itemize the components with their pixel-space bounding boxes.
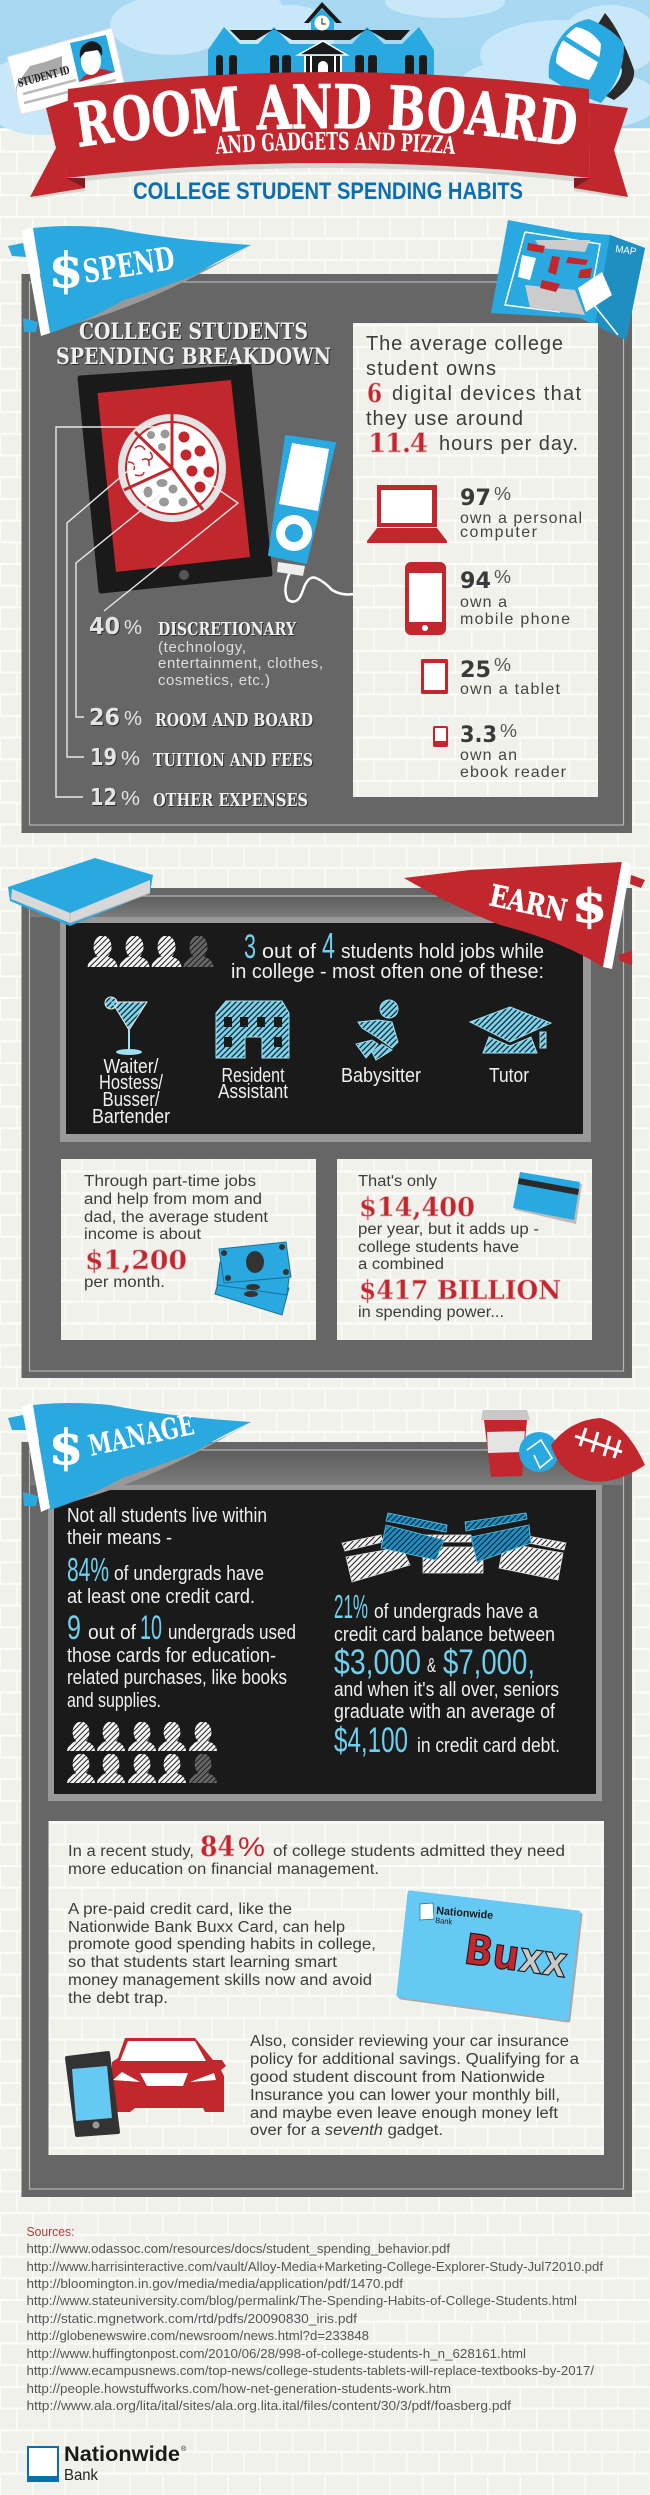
job label: waiter [92,1056,170,1128]
spending power text: $417 BILLION [359,1276,561,1306]
job label: waiter: Hostess/ [99,1072,163,1094]
icon: tablet [421,659,448,694]
school building [208,2,434,78]
stat: tablet: 25 [460,658,491,683]
campus map icon [491,220,645,340]
credit card debt text: graduate with an average of [334,1701,555,1723]
credit card text: those cards for education- [67,1645,276,1667]
tablet with pizza chart [80,367,270,591]
study text: more education on financial management. [68,1861,379,1878]
spending power text: That's only [358,1173,437,1190]
breakdown: other: 12 [90,785,117,811]
panel: spend [22,274,632,833]
dollar icon: $ [49,1420,83,1476]
credit card text [67,1505,296,1712]
icon: football [519,1418,645,1482]
breakdown: tuition: 19 [90,745,117,771]
jobs headline [231,925,544,983]
sources: http://www.ecampusnews.com/top-news/college-students-tablets-will-replace-textbooks-by-2017/ [26,2363,594,2378]
icon: coffee cup [481,1410,530,1477]
credit card text: 9 [67,1609,81,1647]
car insurance text: Insurance you can lower your monthly bill, [250,2087,560,2104]
income text: and help from mom and [84,1191,262,1208]
sources: http://bloomington.in.gov/media/media/application/pdf/1470.pdf [26,2276,403,2291]
credit card debt text: credit card balance between [334,1624,555,1646]
sources: http://people.howstuffworks.com/how-net-generation-students-work.htm [26,2381,451,2396]
manage heading: MANAGE [85,1407,197,1463]
breakdown: other [90,785,308,811]
dollar icon: $ [572,879,607,933]
student ID card [8,28,126,114]
backpack [549,13,634,103]
ID label: STUDENT ID [16,64,71,90]
manage pennant [8,1403,251,1512]
job label: babysitter: Babysitter [341,1065,421,1087]
pre-paid card text: promote good spending habits in college, [68,1936,376,1953]
credit card debt text: $4,100 [334,1721,408,1760]
breakdown: other: OTHER EXPENSES [153,790,308,811]
stat: phone [460,567,570,628]
devices intro text: 6 [367,379,382,409]
sources: http://globenewswire.com/newsroom/news.html?d=233848 [26,2328,369,2343]
earn pennant [404,861,645,969]
Nationwide Bank logo: Nationwide [64,2443,180,2466]
Nationwide Bank logo: Bank [64,2467,99,2484]
sources: http://www.huffingtonpost.com/2010/06/28/998-of-college-students-h_n_628161.html [26,2346,526,2361]
study text: % [238,1832,265,1862]
spending power text: $14,400 [359,1193,475,1223]
credit card text: their means - [67,1527,172,1549]
stat: computer: 97 [460,486,491,511]
jobs headline: 3 [244,928,256,966]
car insurance text: and maybe even leave enough money left [250,2105,559,2122]
credit card text: of undergrads have [114,1563,264,1585]
stat: phone: % [494,567,511,587]
pre-paid card text: A pre-paid credit card, like the [68,1901,292,1918]
job label: resident assistant [218,1065,288,1103]
pizza pie chart [118,414,226,522]
stat: tablet: % [494,655,511,675]
breakdown: discretionary: DISCRETIONARY [158,619,297,640]
dollar icon: $ [49,243,83,299]
spending power text: per year, but it adds up - [358,1221,539,1238]
stat: computer: own a personal [460,510,582,527]
sources [26,2224,603,2413]
icon: dorm [216,1001,289,1058]
blackboard: jobs [60,917,591,1142]
job label: waiter: Waiter/ [104,1056,159,1078]
car insurance text: good student discount from Nationwide [250,2069,545,2086]
stat: ereader [460,721,567,781]
job label: tutor: Tutor [489,1065,529,1087]
stat: phone: 94 [460,569,491,594]
credit card debt text: & [427,1655,436,1677]
devices intro text: hours per day. [439,433,578,455]
panel: earn [22,888,632,1378]
spending power text: in spending power... [358,1304,504,1321]
credit card text: 10 [140,1609,162,1647]
sources: http://www.stateuniversity.com/blog/permalink/The-Spending-Habits-of-College-Students.html [26,2293,577,2308]
icon: money [215,1242,291,1315]
icon: laptop [367,485,447,543]
icon: car [112,2038,226,2112]
study text: In a recent study, [68,1843,194,1860]
devices intro text: they use around [366,408,523,430]
stat: phone: mobile phone [460,611,570,628]
icon: ereader [433,726,448,747]
credit card text: out of [88,1622,136,1644]
credit card debt text [334,1588,560,1760]
pre-paid card text: money management skills now and avoid [68,1972,372,1989]
job label: waiter: Bartender [92,1106,170,1128]
breakdown: discretionary: cosmetics, etc.) [158,672,270,689]
job label: resident assistant: Assistant [218,1081,288,1103]
stat: tablet [460,655,561,698]
spending power text: college students have [358,1239,519,1256]
breakdown: tuition: TUITION AND FEES [153,750,313,771]
stat: ereader: % [500,721,517,741]
sources: http://www.ala.org/lita/ital/sites/ala.org.lita.ital/files/content/30/3/pdf/foasberg.pdf [26,2398,511,2413]
devices intro text: student owns [366,358,496,380]
credit card text: Not all students live within [67,1505,267,1527]
job label: waiter: Busser/ [102,1089,160,1111]
breakdown: tuition: % [121,748,140,770]
panel: manage [22,1442,632,2197]
chalk people: nine of ten [67,1722,217,1783]
study text: 84 [200,1830,235,1863]
credit card debt text: $7,000, [443,1643,535,1682]
credit card text: and supplies. [67,1690,161,1712]
credit card debt text: and when it's all over, seniors [334,1679,559,1701]
sources: http://www.odassoc.com/resources/docs/student_spending_behavior.pdf [26,2241,450,2256]
icon: mobile phone [405,562,446,635]
mp3 player [269,436,353,602]
stat: computer: % [494,484,511,504]
Buxx card: Nationwide [436,1905,494,1922]
icon: credit card [513,1172,582,1224]
icon: graduation cap [470,1007,551,1053]
panel: financial education [48,1821,604,2155]
icon: smartphone [67,2053,118,2135]
breakdown: discretionary: 40 [89,614,120,640]
stat: computer: computer [460,524,538,541]
spend pennant [8,226,251,336]
credit card text: at least one credit card. [67,1586,255,1608]
pre-paid card text: Nationwide Bank Buxx Card, can help [68,1919,345,1936]
title: ROOM AND BOARD [74,84,576,148]
card: income [61,1159,316,1340]
title banner [30,72,628,199]
stat: tablet: own a tablet [460,681,561,698]
jobs headline: out of [262,941,316,963]
pre-paid card text [68,1901,376,2007]
Buxx card: Buxx [462,1924,570,1987]
breakdown: tuition [90,745,313,771]
credit card debt text: 21% [334,1588,368,1625]
leader lines [56,427,238,797]
car insurance text: Also, consider reviewing your car insurance [250,2033,569,2050]
pre-paid card text: the debt trap. [68,1990,168,2007]
breakdown: discretionary: entertainment, clothes, [158,655,323,672]
breakdown: discretionary: (technology, [158,639,246,656]
job label: resident assistant: Resident [222,1065,285,1087]
Nationwide Bank logo: ® [181,2445,187,2453]
card: spending power [337,1159,592,1340]
blackboard: credit cards [48,1485,602,1801]
spending power text: a combined [358,1256,444,1273]
car insurance text: over for a seventh gadget. [250,2122,443,2139]
pre-paid card text: so that students start learning smart [68,1954,338,1971]
income text [84,1173,269,1291]
breakdown: discretionary: % [124,617,142,639]
stat: ereader: own an [460,747,517,764]
map label: MAP [615,244,637,258]
devices intro text [366,333,581,459]
income text: per month. [84,1274,165,1291]
stat: computer [460,484,582,541]
icon: martini [105,997,147,1055]
income text: $1,200 [85,1246,187,1276]
car insurance text: policy for additional savings. Qualifying for a [250,2051,579,2068]
panel: devices [353,323,598,797]
heading: spending breakdown: COLLEGE STUDENTS [79,319,308,345]
study text: of college students admitted they need [273,1843,565,1860]
income text: Through part-time jobs [84,1173,256,1190]
credit card text: undergrads used [168,1622,296,1644]
breakdown: room and board [89,705,313,731]
stat: phone: own a [460,594,507,611]
credit card text: related purchases, like books [67,1667,287,1689]
study text [68,1830,565,1878]
Buxx card: Bank [435,1916,453,1927]
sky with clouds [0,0,650,140]
spend heading: SPEND [80,239,177,291]
jobs headline: students hold jobs while [341,941,544,963]
devices intro text: 11.4 [368,429,428,459]
breakdown: room and board: % [124,708,142,730]
sources: http://static.mgnetwork.com/rtd/pdfs/20090830_iris.pdf [26,2311,357,2326]
credit card debt text: of undergrads have a [374,1601,539,1623]
income text: dad, the average student [84,1209,269,1226]
breakdown: discretionary [89,614,323,689]
earn heading: EARN [486,879,570,929]
heading: spending breakdown: SPENDING BREAKDOWN [56,344,331,370]
stat: ereader: 3.3 [460,723,497,748]
chalk credit cards [342,1513,566,1582]
stat: ereader: ebook reader [460,764,567,781]
credit card debt text: $3,000 [334,1643,421,1682]
subtitle: COLLEGE STUDENT SPENDING HABITS [133,178,523,205]
spending power text [358,1173,561,1321]
devices intro text: digital devices that [392,383,581,405]
banner subtitle: AND GADGETS AND PIZZA [216,132,456,154]
chalk people [88,936,214,967]
credit card debt text: in credit card debt. [417,1735,560,1757]
breakdown: other: % [121,788,140,810]
breakdown: room and board: ROOM AND BOARD [155,710,313,731]
Buxx card [399,1893,580,2020]
jobs headline: 4 [322,925,335,966]
icon: book [8,858,153,926]
Nationwide Bank logo [28,2443,187,2484]
icon: baby [356,1000,398,1060]
sources: http://www.harrisinteractive.com/vault/Alloy-Media+Marketing-College-Explorer-Study-Jul72010.pdf [26,2259,603,2274]
devices intro text: The average college [366,333,563,355]
jobs headline: in college - most often one of these: [231,961,544,983]
credit card text: 84% [67,1551,109,1588]
sources: Sources: [26,2224,74,2239]
income text: income is about [84,1226,202,1243]
heading: spending breakdown [56,319,331,370]
car insurance text [250,2033,579,2139]
breakdown: room and board: 26 [89,705,120,731]
